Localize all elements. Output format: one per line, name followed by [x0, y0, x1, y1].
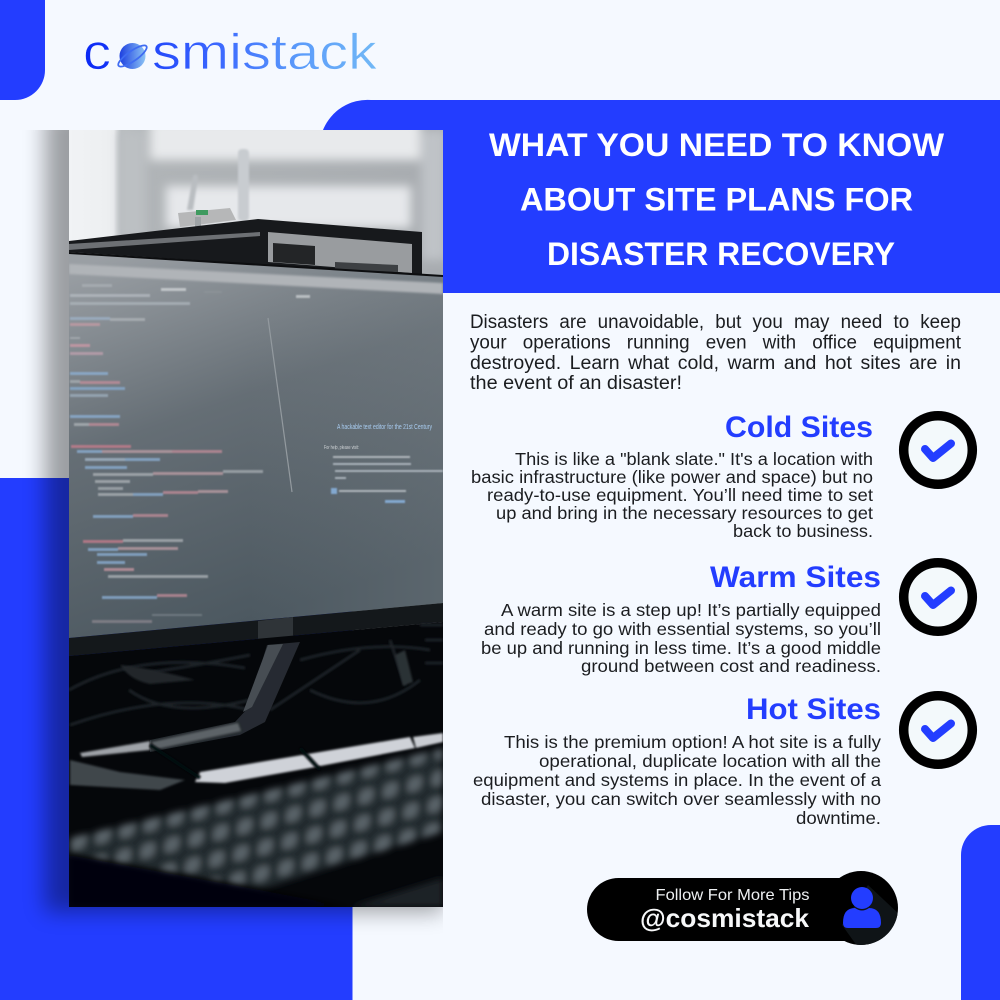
corner shape: top left [0, 0, 45, 100]
body: warm sites: A warm site is a step up! It’s partially equipped [501, 600, 881, 620]
scattered cables [69, 625, 443, 725]
body: hot sites: downtime. [796, 808, 881, 828]
desk light strips [70, 733, 443, 790]
title: WHAT YOU NEED TO KNOW [489, 127, 945, 163]
body: cold sites: ready-to-use equipment. You’ll need time to set [487, 485, 873, 505]
title [489, 127, 945, 272]
body: cold sites: basic infrastructure (like power and space) but no [471, 467, 873, 487]
icon: person [843, 887, 881, 928]
intro paragraph: Disasters are unavoidable, but you may need to keep [470, 312, 961, 333]
intro paragraph [470, 312, 962, 394]
handle: @cosmistack [640, 903, 810, 933]
icon: check hot [904, 696, 972, 764]
header banner [323, 100, 1000, 293]
monitor stand [150, 642, 300, 752]
follow text: Follow For More Tips [656, 887, 810, 904]
section: cold sites [471, 411, 873, 541]
photo: monitor with code and keyboard [69, 120, 446, 907]
corner shape: bottom right [961, 825, 1000, 1000]
follow pill [587, 871, 900, 950]
body: cold sites: up and bring in the necessary resources to get [496, 503, 873, 523]
blurred code lines [70, 284, 310, 623]
dark desk area [69, 622, 443, 907]
body: warm sites: be up and running in less time. It’s a good middle [481, 638, 881, 658]
icon: check cold [904, 416, 972, 484]
body: cold sites: This is like a "blank slate." It's a location with [515, 449, 873, 469]
welcome panel text on screen [324, 424, 443, 503]
avatar circle [840, 871, 898, 945]
black server box [69, 219, 422, 275]
logo letter c: c [83, 24, 111, 80]
monitor bezel [69, 603, 443, 656]
icon: check warm [904, 563, 972, 631]
cable highlight [395, 650, 413, 686]
logo planet [116, 42, 149, 70]
intro paragraph: your operations running even with office equipment [470, 332, 962, 354]
blurred shadow strip [150, 745, 320, 778]
section: hot sites [473, 693, 881, 828]
title: DISASTER RECOVERY [547, 236, 895, 272]
welcome panel text on screen: For help, please visit: [324, 445, 359, 451]
logo: cosmistack [83, 24, 378, 80]
title: ABOUT SITE PLANS FOR [520, 182, 913, 218]
monitor screen [69, 252, 443, 638]
body: warm sites [481, 600, 881, 676]
section: warm sites [481, 561, 881, 676]
corner shape: lower left block [0, 478, 352, 1000]
body: hot sites: operational, duplicate location with all the [539, 751, 881, 771]
intro paragraph: the event of an disaster! [470, 373, 682, 394]
router antennas and box [178, 148, 250, 227]
heading: cold sites: Cold Sites [725, 411, 873, 444]
body: hot sites: disaster, you can switch over seamlessly with no [481, 789, 881, 809]
keyboard foreground [70, 853, 266, 894]
welcome panel text on screen: A hackable text editor for the 21st Century [337, 424, 432, 431]
body: warm sites: and ready to go with essential systems, so you’ll [484, 619, 881, 639]
logo wordmark: smistack [152, 24, 378, 80]
photo shadow [45, 110, 443, 912]
heading: warm sites: Warm Sites [710, 561, 881, 594]
body: hot sites [473, 732, 881, 828]
heading: hot sites: Hot Sites [746, 693, 881, 726]
keyboard [69, 748, 443, 890]
body: hot sites: This is the premium option! A hot site is a fully [504, 732, 881, 752]
body: cold sites [471, 449, 873, 541]
intro paragraph: destroyed. Learn what cold, warm and hot sites are in [470, 353, 961, 374]
body: hot sites: equipment and systems in place. In the event of a [473, 770, 881, 790]
body: cold sites: back to business. [733, 521, 873, 541]
body: warm sites: ground between cost and readiness. [581, 656, 881, 676]
wall background [69, 130, 443, 275]
